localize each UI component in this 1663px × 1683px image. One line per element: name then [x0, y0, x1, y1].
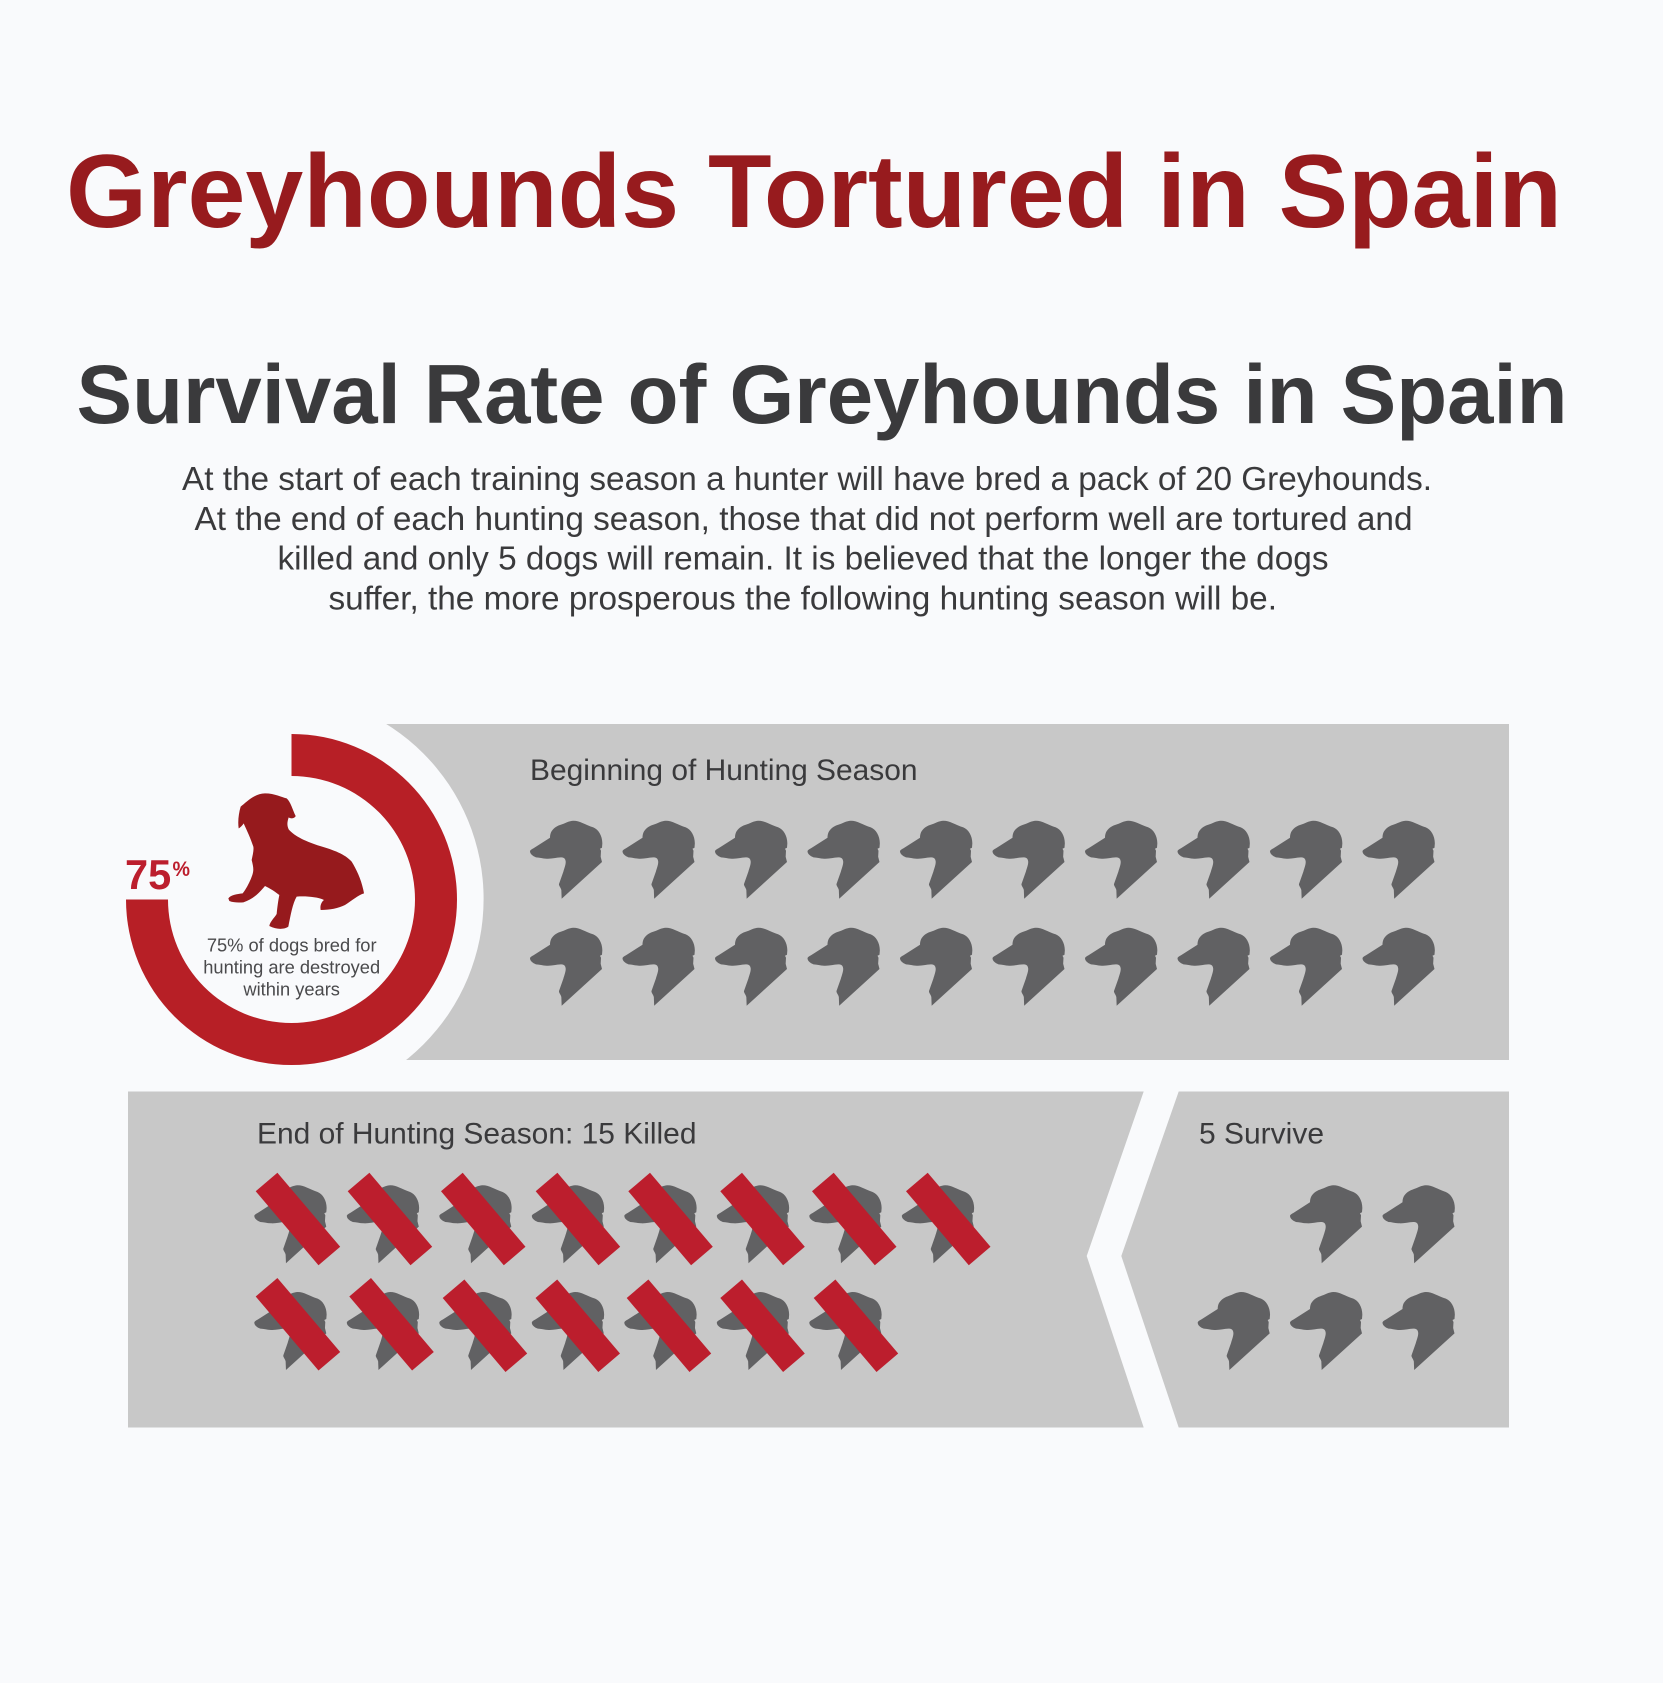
- donut caption: hunting are destroyed: [203, 956, 380, 978]
- intro text block: killed and only 5 dogs will remain. It is believed that the longer the dogs: [278, 540, 1329, 578]
- panel: beginning of hunting season: [380, 724, 1509, 1060]
- dog heads: second row of 3: [1198, 1292, 1455, 1370]
- dog heads: first row of 2: [1290, 1185, 1455, 1263]
- panel heading: Beginning of Hunting Season: [530, 754, 918, 787]
- red strikes: second row: [256, 1278, 898, 1372]
- icon: sitting dog: [228, 793, 364, 929]
- red strikes: first row: [256, 1173, 990, 1265]
- subtitle heading: Survival Rate of Greyhounds in Spain: [76, 347, 1568, 441]
- intro text block: At the end of each hunting season, those that did not perform well are tortured and: [194, 501, 1412, 538]
- dog heads: second row of 7: [254, 1292, 882, 1370]
- dog heads: first row of 8: [254, 1185, 974, 1263]
- statistic: 75%: %: [172, 858, 190, 881]
- statistic: 75%: 75: [125, 851, 171, 898]
- title: Greyhounds Tortured in Spain: [66, 134, 1562, 250]
- panel background: [1121, 1092, 1509, 1428]
- panel background: [128, 1092, 1144, 1428]
- donut chart: 75%: [126, 734, 457, 1065]
- donut caption: [203, 934, 380, 1000]
- dog heads: first row of 10: [530, 821, 1435, 899]
- dog heads: second row of 10: [530, 928, 1435, 1006]
- panel: end of hunting season: [128, 1092, 1144, 1428]
- intro text block: [182, 461, 1432, 618]
- donut caption: 75% of dogs bred for: [207, 934, 377, 956]
- panel background: [380, 724, 1509, 1060]
- ring gap circle: [72, 693, 484, 1105]
- panel heading: End of Hunting Season: 15 Killed: [257, 1118, 696, 1150]
- panel heading: 5 Survive: [1199, 1118, 1324, 1150]
- donut caption: within years: [242, 978, 340, 1000]
- intro text block: suffer, the more prosperous the following hunting season will be.: [328, 580, 1277, 618]
- intro text block: At the start of each training season a hunter will have bred a pack of 20 Greyhounds.: [182, 461, 1432, 498]
- panel: 5 survive: [1121, 1092, 1509, 1428]
